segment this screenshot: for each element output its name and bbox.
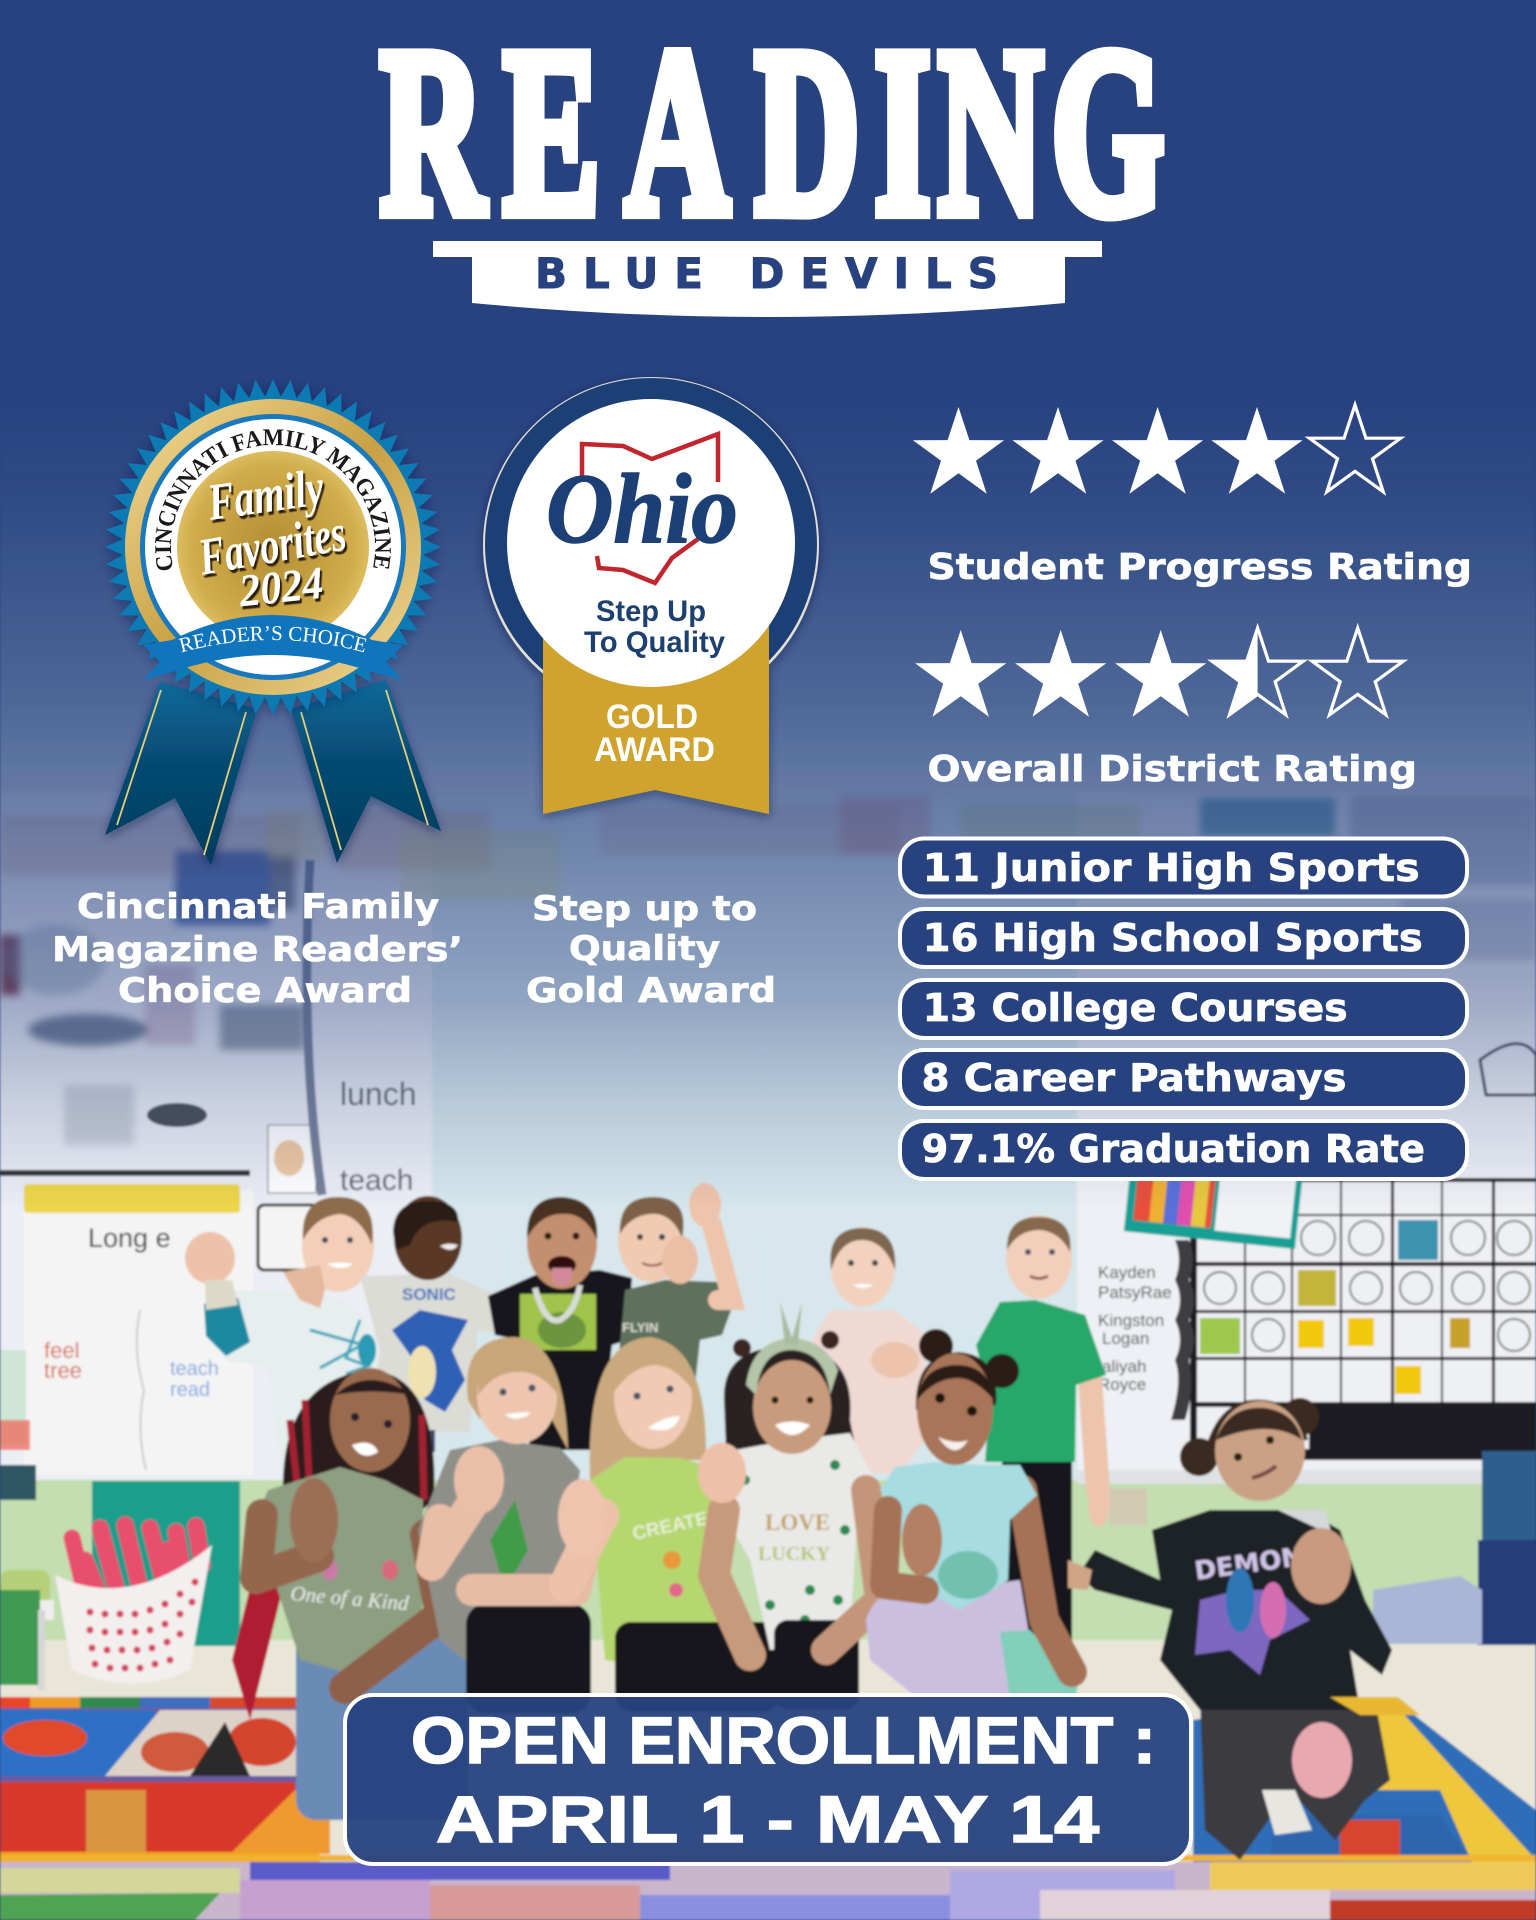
wall art smears [0,795,1536,1145]
floor rug edge under hoodie [1330,1697,1420,1715]
caption: Step up to Quality award: Gold Award [526,971,776,1011]
anchor chart: tree [44,1358,82,1383]
logo: Reading Blue Devils [380,0,1164,317]
ribbon text: READER’S CHOICE [178,626,366,652]
teal board [92,1481,240,1646]
ring text: CINCINNATI FAMILY MAGAZINE [155,429,391,570]
pill: junior high sports [900,838,1467,896]
enrollment line one: OPEN ENROLLMENT : [411,1703,1156,1777]
boy in spider shirt [185,1197,392,1480]
right whiteboard [1077,790,1536,1480]
girl in clover shirt: LOVE [765,1510,830,1535]
step up text: To Quality [584,626,725,659]
whiteboard names: aliyah [1102,1357,1146,1376]
stool and green bin [0,1570,54,1690]
reader's choice ribbon [143,615,403,680]
stat pills [900,838,1467,1179]
caption: Cincinnati Family Magazine award: Cincinnati Family [77,887,439,927]
pill: high school sports [900,909,1467,967]
floor [0,1640,1536,1880]
girl in clover shirt [698,1302,880,1710]
whiteboard names: Logan [1102,1329,1149,1348]
girl in gray shirt [418,1337,591,1714]
whiteboard names: Kingston [1098,1311,1164,1330]
pill: graduation rate [900,1121,1467,1179]
girl with red braids [232,1368,468,1820]
coin text: Favorites [194,505,350,587]
gold award text [594,698,715,769]
step up text: Step Up [596,595,706,628]
pill: college courses: 13 College Courses [923,986,1348,1030]
bottom tray [1077,1470,1536,1484]
starburst [105,379,441,715]
handwritten board words: lunch [340,1076,416,1112]
boy in olive shirt [612,1183,733,1430]
pill: career pathways: 8 Career Pathways [922,1056,1346,1100]
girl in pink sweater [812,1227,926,1475]
pill: college courses [900,980,1467,1038]
blurred carpet foreground [0,1862,1536,1920]
badge: Ohio Step Up To Quality [483,377,819,814]
pill: career pathways [900,1050,1467,1108]
carpet left rainbow edge [0,1697,300,1708]
gold ring [125,399,421,695]
anchor chart: read [170,1379,210,1401]
girl with red braids: One of a Kind [290,1581,410,1615]
white circle [507,399,795,687]
navy ring [485,378,817,710]
gold ribbon [543,620,769,814]
whiteboard names: Kayden [1098,1263,1156,1282]
handwritten board words [340,1076,416,1197]
anchor chart [24,1184,253,1475]
coin text: Family [204,459,328,532]
boy in olive shirt: FLYIN [622,1320,658,1335]
blue chair [1478,1451,1536,1645]
ceiling molding [0,770,1536,792]
carpet [0,1697,1536,1920]
navy fade overlay [0,0,1536,1240]
girl in black hoodie: DEMON [1193,1542,1305,1587]
blue tarp [1373,1576,1482,1644]
ribbon tails [105,680,441,865]
handwritten board words: teach [340,1164,413,1197]
pill: junior high sports: 11 Junior High Sports [923,846,1420,890]
boy in green shirt [976,1215,1110,1645]
color poster [1124,1161,1302,1249]
anchor chart: teach [170,1358,219,1380]
gold coin [177,451,369,643]
blue ring [140,414,406,680]
boy in Sonic shirt: SONIC [402,1285,456,1304]
caption: Step up to Quality award [526,889,776,1011]
coin text [194,459,350,616]
whiteboard names [1098,1263,1172,1394]
student progress label: Student Progress Rating [928,547,1472,588]
girl in black hoodie [1068,1398,1392,1860]
banner text: BLUE DEVILS [535,249,998,298]
green wainscot [0,1480,1536,1650]
gold award text: AWARD [594,731,715,769]
marker tray stripe [1171,1240,1194,1420]
left whiteboard [0,790,432,1490]
anchor chart: Long e [88,1223,171,1253]
caption: Cincinnati Family Magazine award: Choice Award [118,971,412,1011]
caption: Cincinnati Family Magazine award [52,887,463,1011]
white ring [145,419,401,675]
step up text [584,595,725,659]
clock on board [258,1205,318,1270]
girl in lime shirt: CREATE [631,1508,710,1545]
girl in teal shirt [866,1329,1078,1700]
caption: Step up to Quality award: Quality [569,929,720,969]
rod [0,1170,250,1176]
outer ring [483,377,819,713]
badge: Family Favorites medal [103,379,443,866]
pill: graduation rate: 97.1% Graduation Rate [922,1127,1425,1171]
whiteboard names: PatsyRae [1098,1283,1172,1302]
phonics label [147,1103,207,1127]
student progress stars [913,405,1401,494]
girl in lime shirt [558,1337,780,1712]
state outline [582,434,718,583]
Ohio script: Ohio [546,453,738,564]
coin text: 2024 [236,557,326,616]
banner [433,241,1102,317]
enrollment line two: APRIL 1 - MAY 14 [436,1782,1099,1856]
pill: high school sports: 16 High School Sports [923,916,1423,960]
outlet plate [1110,1489,1147,1525]
open enrollment box [345,1695,1191,1864]
caption: Step up to Quality award: Step up to [532,889,757,929]
gold award text: GOLD [606,698,698,736]
anchor chart: feel [44,1338,79,1363]
girl in clover shirt: LUCKY [758,1543,831,1565]
wordmark READING: READING [380,0,1164,264]
painted tree trunk [307,860,322,1195]
caption: Cincinnati Family Magazine award: Magazine Readers’ [52,930,463,970]
overall district label: Overall District Rating [928,749,1417,790]
whiteboard names: Royce [1098,1375,1146,1394]
boy in black shirt [488,1197,632,1450]
calendar grid [1190,1178,1536,1460]
quiet card [268,1125,316,1193]
overall district stars [915,628,1403,717]
basket with noodles [55,1525,212,1684]
side shelf [0,1350,26,1445]
boy in Sonic shirt [283,1196,510,1452]
